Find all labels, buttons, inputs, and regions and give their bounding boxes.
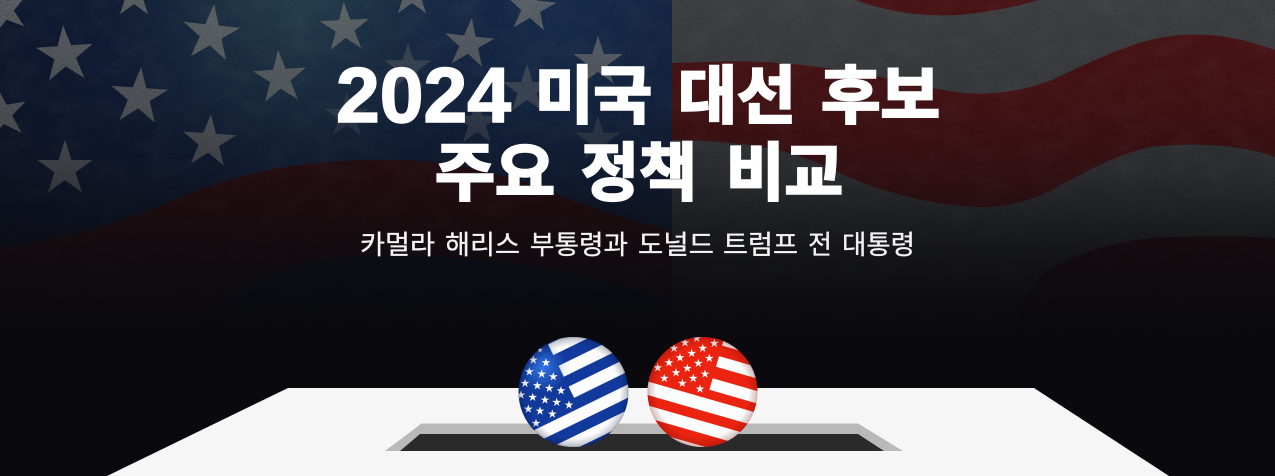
title line 1: 미국	[535, 62, 652, 132]
subtitle	[360, 230, 915, 260]
title line 1: 2024	[336, 51, 511, 139]
subtitle: 전	[808, 230, 832, 260]
icon: blue flag ball	[518, 337, 628, 447]
flag stripes: lower left	[0, 160, 672, 400]
title line 1	[336, 51, 940, 139]
subtitle: 부통령과	[530, 230, 628, 260]
subtitle: 해리스	[445, 230, 520, 260]
subtitle: 대통령	[842, 230, 915, 260]
flag stripes: grey field and red bands, right	[672, 0, 1275, 400]
ballot box top surface	[107, 388, 1169, 476]
title line 2: 비교	[726, 139, 843, 209]
flag stars	[0, 0, 623, 192]
grunge texture	[0, 0, 1275, 340]
title	[336, 51, 940, 209]
title line 2: 주요	[435, 139, 555, 209]
dark fade to bottom	[0, 0, 1275, 345]
icon: red flag ball	[648, 337, 758, 447]
subtitle: 도널드	[638, 230, 714, 260]
flag canton: navy field	[0, 0, 672, 400]
title line 1: 후보	[821, 62, 940, 132]
title line 2: 정책	[581, 139, 697, 209]
subtitle: 카멀라	[360, 230, 435, 260]
ballot slot	[385, 424, 903, 451]
title line 1: 대선	[678, 62, 796, 132]
ballot box	[107, 388, 1169, 476]
subtitle: 트럼프	[723, 230, 798, 260]
title line 2	[435, 139, 843, 209]
